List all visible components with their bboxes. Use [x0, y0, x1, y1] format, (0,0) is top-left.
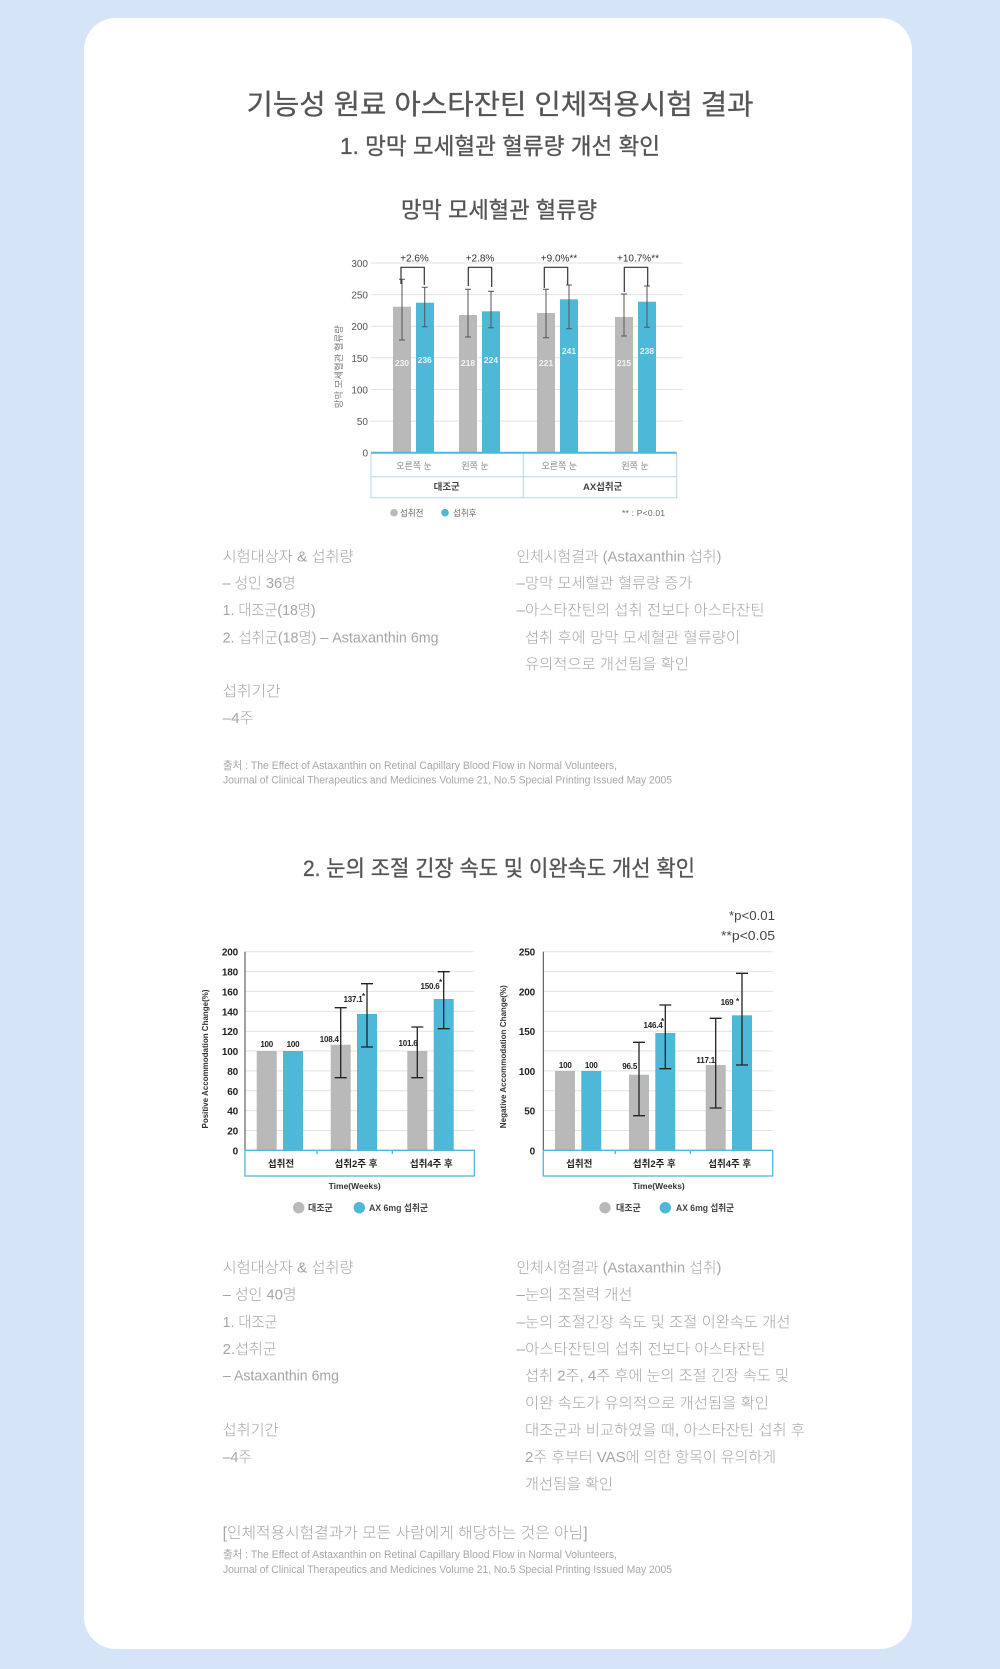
category box: [245, 1150, 474, 1176]
source note, section 1: 출처 : The Effect of Astaxanthin on Retinal Capillary Blood Flow in Normal Volunteers,: [223, 759, 617, 772]
text block: subjects and dose, section 2: –4주: [223, 1449, 252, 1466]
category labels: [268, 1158, 453, 1170]
y axis ticks: 300: [351, 259, 368, 270]
y axis ticks: 40: [227, 1107, 239, 1118]
value labels: 137.1: [343, 995, 363, 1004]
text block: results, section 2: 섭취 2주, 4주 후에 눈의 조절 긴장 속도 및: [525, 1368, 789, 1384]
bars: before intake: [393, 307, 633, 453]
text block: results, section 2: 인체시험결과 (Astaxanthin 섭취): [516, 1260, 722, 1276]
category labels: 섭취전: [268, 1158, 294, 1170]
bar values: 241: [562, 346, 576, 356]
bar chart: retinal capillary blood flow: [333, 254, 683, 518]
y axis ticks: 100: [351, 386, 368, 396]
legend: AX 6mg 섭취군: [676, 1202, 734, 1213]
bar values: [395, 346, 654, 368]
y axis ticks: 50: [357, 417, 368, 428]
text block: results, section 1: –망막 모세혈관 혈류량 증가: [516, 575, 693, 592]
error bars: [633, 973, 748, 1116]
bars: AX 6mg: [283, 999, 454, 1150]
legend: 섭취전: [400, 508, 423, 518]
y axis ticks: 150: [351, 354, 368, 365]
text block: results, section 1: 인체시험결과 (Astaxanthin 섭취): [516, 548, 722, 566]
bar values: 215: [617, 358, 631, 368]
y axis ticks: 120: [222, 1027, 239, 1038]
category labels: 섭취전: [566, 1158, 592, 1170]
y axis ticks: [222, 948, 239, 1157]
y axis ticks: 60: [227, 1087, 239, 1098]
y axis ticks: 100: [222, 1047, 239, 1058]
legend: [599, 1202, 734, 1213]
comparison brackets: [401, 267, 648, 292]
y axis ticks: 200: [222, 948, 239, 959]
legend: AX 6mg 섭취군: [369, 1202, 428, 1213]
text block: subjects and dose, section 1: – 성인 36명: [223, 575, 296, 592]
value labels: 100: [559, 1061, 572, 1070]
x axis title: Time(Weeks): [633, 1181, 685, 1191]
source note, section 2: Journal of Clinical Therapeutics and Medicines Volume 21, No.5 Special Printing Issued May 2005: [223, 1564, 672, 1576]
chart heading: retinal capillary blood flow: 망막 모세혈관 혈류량: [401, 198, 597, 223]
value labels: 169: [721, 998, 734, 1007]
subtitle: section 1: 1. 망막 모세혈관 혈류량 개선 확인: [340, 133, 660, 159]
y axis ticks: 150: [519, 1027, 536, 1038]
category table: 왼쪽 눈: [621, 461, 649, 471]
y axis ticks: 140: [222, 1007, 239, 1018]
value labels: *: [661, 1017, 665, 1026]
category box: [543, 1150, 773, 1176]
bar values: 218: [461, 358, 475, 368]
text block: subjects and dose, section 2: 시험대상자 & 섭취량: [223, 1260, 354, 1276]
text block: subjects and dose, section 2: 2.섭취군: [223, 1341, 277, 1358]
text block: results, section 2: 개선됨을 확인: [525, 1476, 613, 1493]
legend: [293, 1202, 428, 1213]
text block: results, section 2: 2주 후부터 VAS에 의한 항목이 유의하게: [525, 1449, 776, 1466]
change percentages: +10.7%**: [617, 254, 659, 264]
category labels: [566, 1158, 751, 1170]
source note, section 1: Journal of Clinical Therapeutics and Medicines Volume 21, No.5 Special Printing Issued May 2005: [223, 774, 672, 786]
bar chart: negative accommodation: [498, 948, 773, 1213]
text block: subjects and dose, section 2: – Astaxanthin 6mg: [223, 1368, 339, 1384]
value labels: *: [362, 992, 366, 1001]
y axis label: 망막 모세혈관 혈류량: [333, 325, 344, 408]
legend: 대조군: [616, 1202, 641, 1213]
category labels: 섭취2주 후: [633, 1158, 676, 1170]
text block: results, section 1: [516, 548, 764, 673]
bar chart: positive accommodation: [200, 948, 474, 1213]
bar values: 238: [640, 346, 654, 356]
value labels: [260, 978, 443, 1049]
bars: control: [257, 1045, 427, 1150]
category table: 오른쪽 눈: [396, 461, 432, 471]
y axis ticks: 100: [519, 1067, 536, 1078]
bar values: 224: [484, 355, 498, 365]
y axis ticks: 250: [351, 291, 368, 302]
error bars: [399, 279, 650, 340]
significance note: **p<0.05: [721, 928, 775, 943]
value labels: 100: [287, 1040, 300, 1049]
text block: subjects and dose, section 1: 1. 대조군(18명): [223, 602, 316, 619]
text block: results, section 1: 유의적으로 개선됨을 확인: [525, 656, 689, 673]
y axis ticks: 160: [222, 987, 239, 998]
value labels: 146.4: [643, 1021, 663, 1030]
text block: results, section 2: –눈의 조절긴장 속도 및 조절 이완속도 개선: [516, 1314, 790, 1331]
text block: subjects and dose, section 2: 1. 대조군: [223, 1314, 278, 1331]
y axis ticks: 180: [222, 968, 239, 979]
heading: section 2: 2. 눈의 조절 긴장 속도 및 이완속도 개선 확인: [303, 856, 695, 881]
bars: after intake: [416, 299, 656, 453]
category labels: 섭취4주 후: [410, 1158, 453, 1170]
y axis ticks: 200: [351, 322, 368, 333]
y axis ticks: 0: [233, 1146, 239, 1157]
text block: subjects and dose, section 1: [223, 548, 439, 727]
category table: [371, 453, 677, 498]
value labels: 150.6: [420, 982, 440, 991]
bar values: 230: [395, 358, 409, 368]
y axis label: Negative Accommodation Change(%): [498, 985, 508, 1128]
category table: 왼쪽 눈: [461, 461, 489, 471]
category table: 대조군: [434, 481, 460, 493]
text block: subjects and dose, section 1: –4주: [223, 710, 254, 727]
change percentages: +9.0%**: [541, 254, 577, 264]
value labels: 100: [585, 1061, 598, 1070]
category labels: 섭취4주 후: [708, 1158, 751, 1170]
text block: results, section 1: –아스타잔틴의 섭취 전보다 아스타잔틴: [516, 602, 764, 619]
category table: 오른쪽 눈: [541, 461, 577, 471]
y axis ticks: 200: [519, 987, 536, 998]
legend: [390, 508, 665, 518]
y axis ticks: 0: [530, 1146, 536, 1157]
change percentages: +2.8%: [466, 254, 494, 264]
category labels: 섭취2주 후: [335, 1158, 378, 1170]
text block: subjects and dose, section 2: [223, 1260, 354, 1466]
bars: AX 6mg: [581, 1015, 752, 1150]
text block: results, section 2: –아스타잔틴의 섭취 전보다 아스타잔틴: [516, 1341, 766, 1358]
value labels: 117.1: [696, 1056, 716, 1065]
value labels: *: [736, 997, 740, 1006]
bar values: 236: [418, 355, 432, 365]
text block: results, section 1: 섭취 후에 망막 모세혈관 혈류량이: [525, 630, 740, 646]
significance note: [721, 908, 775, 943]
y axis ticks: 80: [227, 1067, 239, 1078]
title: 기능성 원료 아스타잔틴 인체적용시험 결과: [246, 89, 754, 120]
error bars: [335, 972, 450, 1078]
bars: control: [555, 1065, 726, 1150]
y axis ticks: [351, 259, 368, 460]
y axis label: Positive Accommodation Change(%): [200, 989, 210, 1128]
value labels: *: [439, 978, 443, 987]
y axis ticks: 20: [227, 1126, 239, 1138]
value labels: [559, 997, 740, 1071]
legend: 대조군: [308, 1202, 333, 1213]
y axis ticks: 50: [524, 1107, 536, 1118]
legend: 섭취후: [453, 508, 477, 518]
text block: results, section 2: 대조군과 비교하였을 때, 아스타잔틴 섭취 후: [525, 1422, 805, 1439]
change percentages: [400, 254, 659, 264]
y axis ticks: [519, 948, 536, 1157]
text block: subjects and dose, section 1: 섭취기간: [223, 683, 281, 700]
y axis ticks: 250: [519, 948, 536, 959]
y axis ticks: 0: [362, 449, 368, 460]
source note, section 2: [223, 1548, 672, 1576]
text block: subjects and dose, section 1: 2. 섭취군(18명) – Astaxanthin 6mg: [223, 630, 439, 646]
text block: subjects and dose, section 2: – 성인 40명: [223, 1286, 297, 1304]
text block: subjects and dose, section 1: 시험대상자 & 섭취량: [223, 548, 354, 566]
significance note: *p<0.01: [729, 908, 775, 923]
value labels: 108.4: [320, 1035, 340, 1044]
legend: ** : P<0.01: [622, 508, 665, 518]
x axis title: Time(Weeks): [329, 1181, 381, 1191]
text block: subjects and dose, section 2: 섭취기간: [223, 1422, 279, 1439]
source note, section 2: 출처 : The Effect of Astaxanthin on Retinal Capillary Blood Flow in Normal Volunteers,: [223, 1548, 617, 1561]
text block: results, section 2: [516, 1260, 805, 1493]
change percentages: +2.6%: [400, 254, 429, 264]
disclaimer: [인체적용시험결과가 모든 사람에게 해당하는 것은 아님]: [223, 1524, 588, 1542]
category table: AX섭취군: [583, 481, 623, 493]
value labels: 96.5: [622, 1062, 638, 1071]
text block: results, section 2: –눈의 조절력 개선: [516, 1286, 632, 1304]
text block: results, section 2: 이완 속도가 유의적으로 개선됨을 확인: [525, 1395, 769, 1412]
value labels: 100: [260, 1040, 274, 1049]
bar values: 221: [539, 358, 553, 368]
value labels: 101.6: [398, 1039, 418, 1048]
source note, section 1: [223, 759, 672, 786]
